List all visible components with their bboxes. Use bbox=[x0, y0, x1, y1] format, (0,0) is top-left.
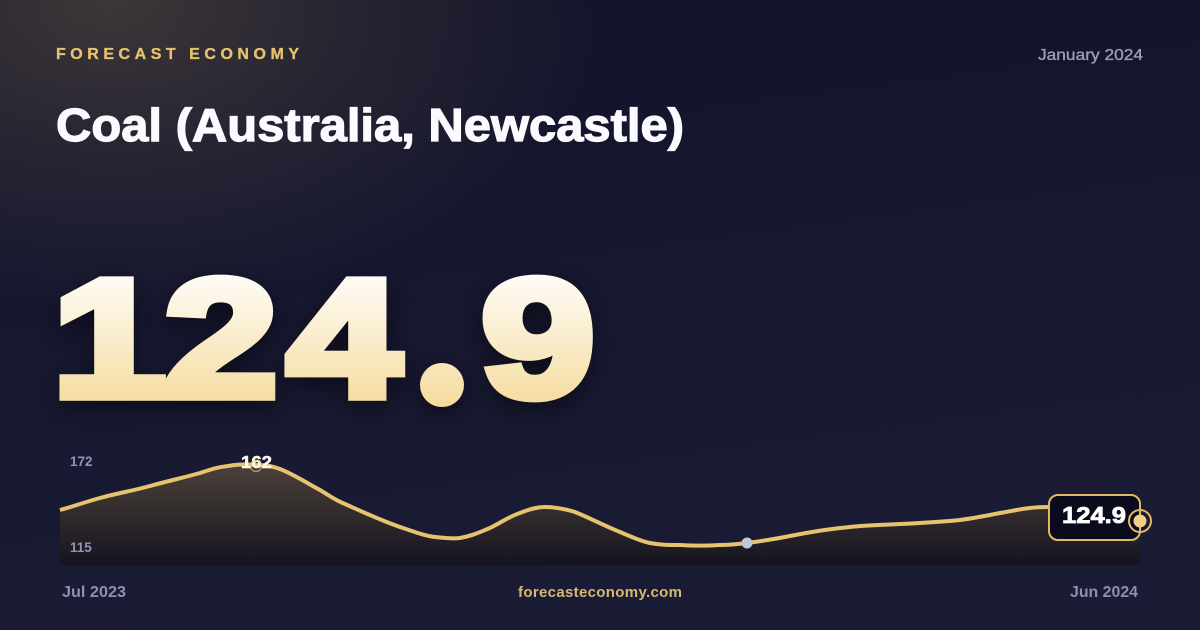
main value: 4 bbox=[287, 245, 400, 432]
brand label: FORECAST ECONOMY bbox=[56, 46, 299, 63]
axis min label: 115 bbox=[70, 540, 92, 555]
main value: 2 bbox=[164, 245, 278, 432]
title: Coal (Australia, Newcastle) bbox=[56, 99, 684, 151]
main value: . bbox=[425, 301, 459, 414]
website: forecasteconomy.com bbox=[518, 584, 682, 601]
date: January 2024 bbox=[1038, 47, 1143, 64]
axis max label: 172 bbox=[70, 454, 93, 469]
area fill bbox=[60, 464, 1140, 565]
peak marker bbox=[250, 460, 262, 472]
current value badge: 124.9 bbox=[1062, 502, 1126, 528]
current value badge bbox=[1049, 495, 1140, 540]
main value: 9 bbox=[481, 245, 595, 432]
main value bbox=[52, 245, 595, 432]
start date label: Jul 2023 bbox=[62, 584, 126, 601]
peak label: 162 bbox=[241, 452, 272, 472]
current value marker bbox=[1129, 510, 1151, 532]
chart: price trend bbox=[60, 452, 1151, 565]
low marker bbox=[742, 538, 752, 548]
main value: 1 bbox=[52, 245, 166, 432]
trend line bbox=[60, 464, 1060, 546]
end date label: Jun 2024 bbox=[1070, 584, 1138, 601]
